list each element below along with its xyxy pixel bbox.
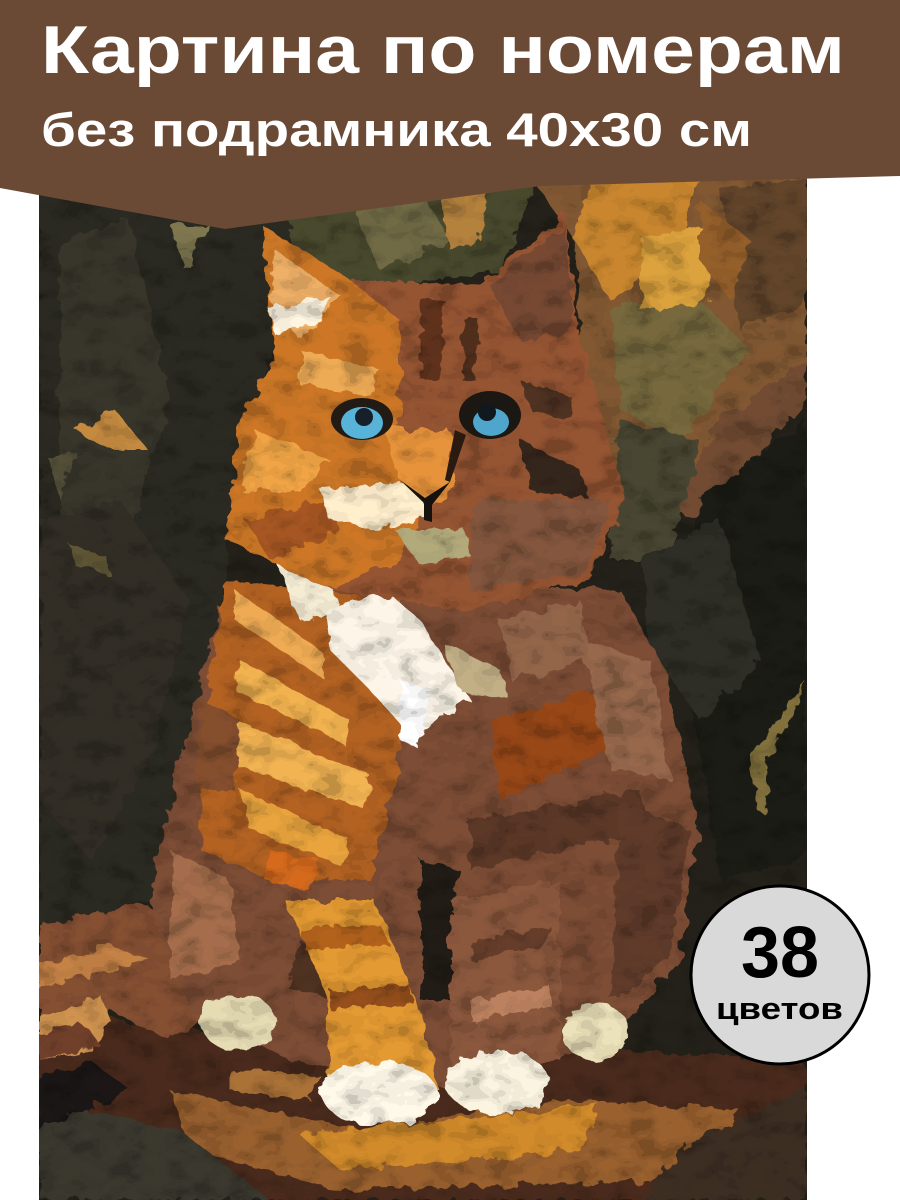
cat eyes and nose	[331, 391, 521, 522]
cat paws	[200, 994, 630, 1126]
paint mottling texture	[39, 176, 807, 1200]
ground	[39, 1010, 807, 1200]
cat chest fur	[276, 563, 508, 748]
cat tail	[39, 902, 200, 1060]
forest background	[39, 176, 807, 930]
badge: 38 colours: 38	[741, 913, 819, 993]
subtitle: без подрамника 40х30 см	[41, 103, 752, 156]
header banner	[0, 0, 900, 229]
title: Картина по номерам	[41, 12, 845, 88]
cat front legs	[285, 880, 560, 1090]
badge: 38 colours: цветов	[716, 991, 843, 1026]
painting: ginger cat in autumn forest	[39, 176, 807, 1200]
badge: 38 colours	[691, 886, 869, 1064]
cat body	[150, 580, 700, 1090]
cat head	[225, 212, 625, 610]
